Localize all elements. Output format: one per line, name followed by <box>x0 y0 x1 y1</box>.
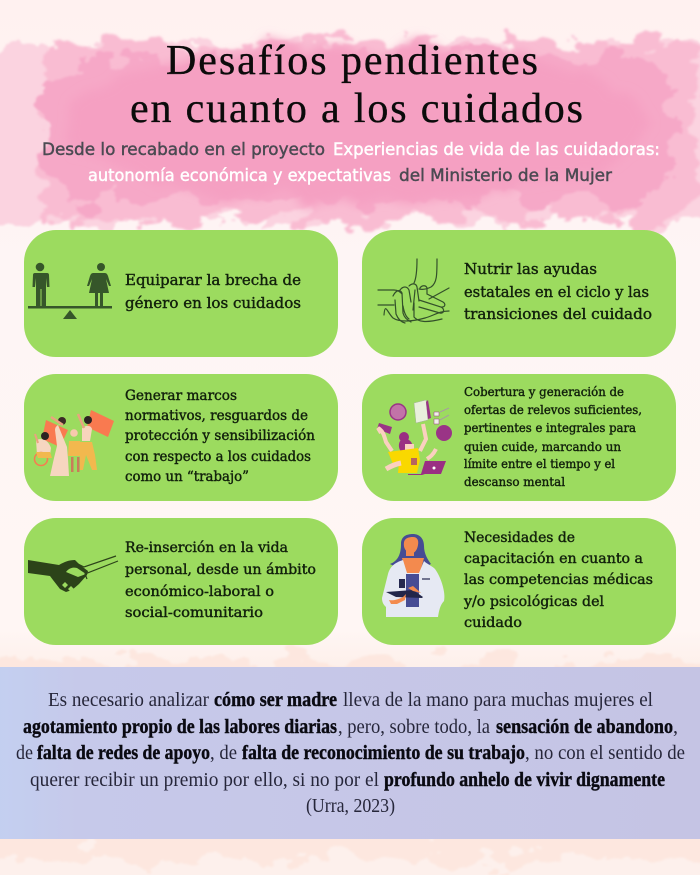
panel: brecha de género <box>24 230 338 357</box>
text: género en los cuidados <box>125 296 301 312</box>
text: Generar marcos <box>125 388 237 404</box>
text: límite entre el tiempo y el <box>464 457 615 471</box>
panel: re-inserción <box>24 518 338 645</box>
panel: marcos normativos <box>24 374 338 501</box>
text: estatales en el ciclo y las <box>464 285 649 301</box>
text: y/o psicológicas del <box>463 594 605 610</box>
quote text: cómo ser madre <box>214 689 337 711</box>
text: ofertas de relevos suficientes, <box>464 403 642 417</box>
quote text: (Urra, 2023) <box>306 795 395 817</box>
text: social-comunitario <box>125 605 263 621</box>
quote text: sensación de abandono <box>496 716 673 738</box>
icon: doctor with clipboard <box>382 534 444 617</box>
text: Cobertura y generación de <box>464 385 624 399</box>
text: cuidado <box>464 615 522 631</box>
subtitle: Experiencias de vida de las cuidadoras: <box>333 140 660 160</box>
text <box>464 262 652 323</box>
subtitle <box>42 140 660 186</box>
icon: handshake <box>28 556 118 592</box>
quote text: querer recibir un premio por ello, si no por el <box>30 769 379 791</box>
text <box>125 540 316 621</box>
icon: women marching with flags <box>34 410 114 476</box>
subtitle: del Ministerio de la Mujer <box>399 166 612 186</box>
text: como un “trabajo” <box>125 469 249 485</box>
text: transiciones del cuidado <box>464 307 652 323</box>
title: en cuanto a los cuidados <box>130 86 583 132</box>
text: económico-laboral o <box>125 584 274 600</box>
icon: clasped hands <box>378 259 449 323</box>
quote text: falta de reconocimiento de su trabajo <box>242 742 525 764</box>
text: con respecto a los cuidados <box>125 449 311 465</box>
title <box>130 38 583 132</box>
panel: ayudas estatales <box>362 230 676 357</box>
text: descanso mental <box>464 475 565 489</box>
text: protección y sensibilización <box>125 428 315 444</box>
text: Equiparar la brecha de <box>125 273 301 289</box>
text: las competencias médicas <box>464 572 653 588</box>
text <box>125 388 315 485</box>
text <box>463 530 653 631</box>
quote text: agotamiento propio de las labores diarias <box>23 716 337 738</box>
text: Nutrir las ayudas <box>464 262 597 278</box>
subtitle: autonomía económica y expectativas <box>88 166 391 186</box>
quote text <box>16 689 685 817</box>
quote text: falta de redes de apoyo <box>37 742 210 764</box>
text: Necesidades de <box>464 530 575 546</box>
quote text: , <box>673 716 678 738</box>
quote text: profundo anhelo de vivir dignamente <box>384 769 665 791</box>
text: normativos, resguardos de <box>125 408 308 424</box>
text: quien cuide, marcando un <box>464 440 621 454</box>
subtitle: Desde lo recabado en el proyecto <box>42 140 325 160</box>
quote text: de <box>16 742 33 764</box>
text <box>125 273 301 312</box>
quote text: lleva de la mano para muchas mujeres el <box>343 689 653 711</box>
quote text: , no con el sentido de <box>525 742 685 764</box>
watercolor pink splash <box>0 42 700 220</box>
icon: gender balance scale <box>28 263 112 319</box>
text: pertinentes e integrales para <box>464 421 636 435</box>
text: capacitación en cuanto a <box>464 551 643 567</box>
panel: capacitación <box>362 518 676 645</box>
text <box>464 385 642 489</box>
quote text: , pero, sobre todo, la <box>338 716 490 738</box>
quote text: , de <box>210 742 237 764</box>
panel: relevos y descanso <box>362 374 676 501</box>
panel: quote <box>0 667 700 839</box>
text: Re-inserción en la vida <box>125 540 288 556</box>
icon: woman juggling tasks <box>377 400 452 475</box>
text: personal, desde un ámbito <box>125 562 316 578</box>
title: Desafíos pendientes <box>166 38 538 84</box>
quote text: Es necesario analizar <box>48 689 209 711</box>
